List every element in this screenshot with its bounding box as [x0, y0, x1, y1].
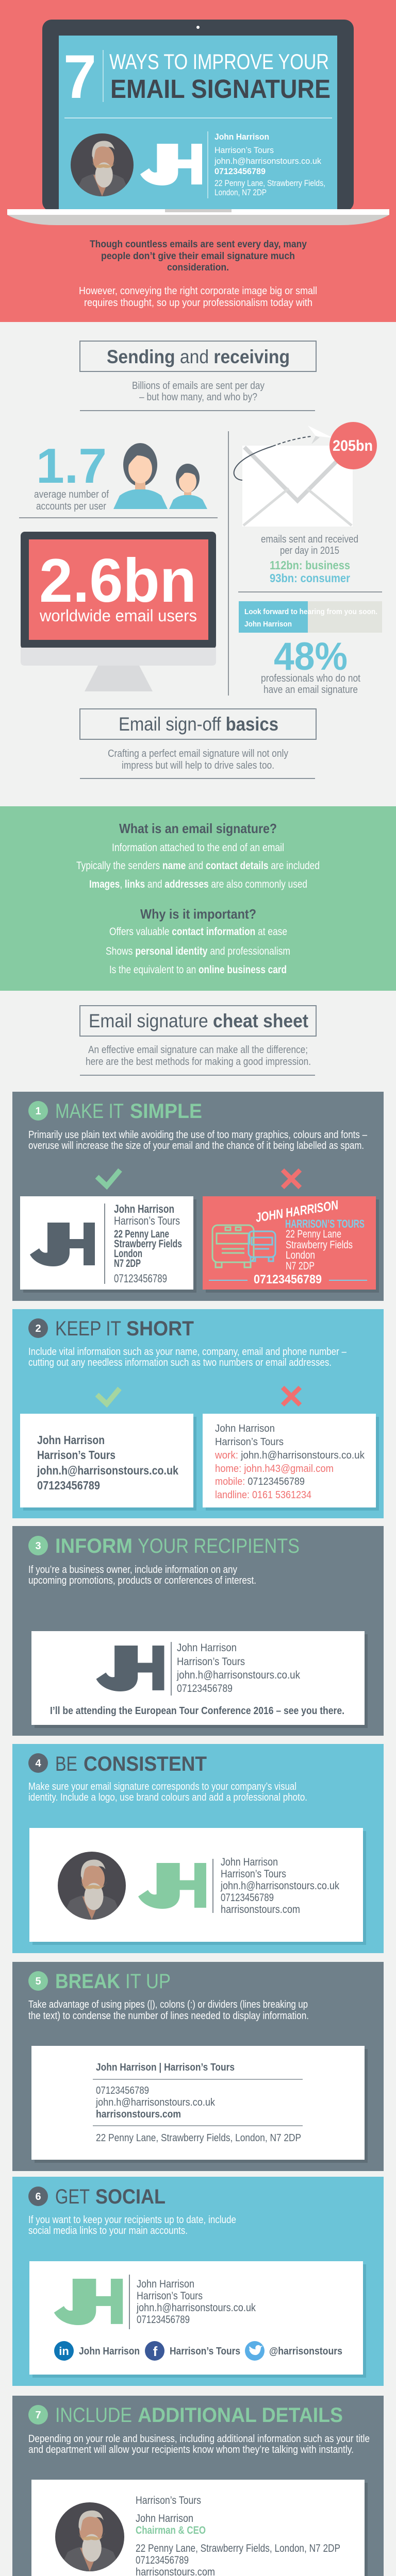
card: short signature	[20, 1414, 196, 1511]
card: good simple signature: Harrison’s Tours	[114, 1214, 180, 1227]
panel 3 description	[28, 1564, 256, 1586]
card: branded signature: Harrison’s Tours	[221, 1868, 286, 1880]
panel: what is an email signature: Information attached to the end of an email	[112, 842, 284, 854]
icon: facebook: f	[153, 2344, 158, 2359]
icon: cross	[283, 1387, 300, 1405]
panel 3 title: YOUR RECIPIENTS	[138, 1535, 300, 1557]
panel 3 title: INFORM	[55, 1535, 133, 1557]
card: bad busy signature: Strawberry Fields	[286, 1239, 353, 1251]
card: signature with event: 07123456789	[177, 1683, 233, 1694]
stat: 48%: Look forward to hearing from you soon.	[244, 607, 377, 616]
card: good simple signature: John Harrison	[114, 1202, 174, 1215]
subtitle: crafting: impress but will help to drive sales too.	[122, 760, 274, 771]
panel 6 description: social media links to your main accounts.	[28, 2225, 188, 2236]
icon: check	[97, 1170, 120, 1186]
card: bad busy signature: London	[286, 1249, 315, 1261]
panel: what is an email signature: Is the equivalent to an online business card	[109, 964, 287, 976]
stat: 1.7 accounts: accounts per user	[36, 501, 106, 512]
subtitle: billions: – but how many, and who by?	[139, 392, 257, 403]
subtitle: effective: here are the best methods for making a good impression.	[86, 1056, 311, 1067]
panel 4 description	[28, 1781, 307, 1803]
card: cluttered signature: work: john.h@harrisonstours.co.uk	[214, 1450, 365, 1461]
panel 5: break it up	[12, 1962, 384, 2171]
stat: 48%: 48%	[274, 635, 348, 679]
monitor: 2.6bn users: 2.6bn	[39, 546, 196, 615]
panel 1 description	[28, 1129, 368, 1151]
number badge 3: 3	[35, 1540, 41, 1552]
card: social signature: John Harrison	[79, 2346, 140, 2357]
card: good simple signature: 07123456789	[114, 1272, 167, 1285]
card: short signature: john.h@harrisonstours.co.uk	[37, 1464, 178, 1477]
panel 5 title: BREAK	[55, 1970, 120, 1993]
subtitle: crafting	[108, 748, 288, 771]
icon: twitter	[245, 2341, 265, 2361]
envelope: 205bn	[234, 422, 377, 527]
intro text: consideration.	[167, 262, 229, 273]
header band	[0, 0, 396, 322]
card: social signature	[29, 2261, 366, 2378]
intro text: people don’t give their email signature much	[101, 251, 295, 262]
panel 7 title: ADDITIONAL DETAILS	[138, 2404, 343, 2427]
panel 1: make it simple	[12, 1092, 384, 1301]
card: social signature: @harrisonstours	[269, 2346, 342, 2357]
card: social signature: Harrison’s Tours	[170, 2346, 240, 2357]
panel 6 title	[55, 2185, 166, 2208]
title: 7	[63, 42, 96, 111]
stat text: emails per day: per day in 2015	[280, 545, 339, 556]
number badge 7: 7	[35, 2410, 41, 2421]
stat: 48%: have an email signature	[263, 684, 358, 696]
card: good simple signature: London	[114, 1248, 142, 1260]
card: bad busy signature: 07123456789	[254, 1273, 322, 1286]
heading: sending and receiving	[80, 341, 316, 371]
panel 7 title	[55, 2404, 343, 2427]
panel 6: get social	[12, 2177, 384, 2386]
intro text: requires thought, so up your professionalism today with	[84, 297, 312, 309]
heading: cheat sheet	[80, 1006, 316, 1036]
panel 2 description	[28, 1346, 347, 1368]
header signature: 22 Penny Lane, Strawberry Fields,	[214, 178, 325, 188]
icon: check	[97, 1388, 120, 1404]
card: bad busy signature	[203, 1196, 379, 1293]
card: bad busy signature: HARRISON’S TOURS	[285, 1217, 365, 1230]
number badge 6	[28, 2187, 48, 2206]
panel 3 description: If you’re a business owner, include information on any	[28, 1564, 237, 1575]
card: bad busy signature: N7 2DP	[286, 1260, 315, 1272]
card: detailed signature: Harrison’s Tours	[136, 2495, 201, 2506]
header signature: john.h@harrisonstours.co.uk	[214, 156, 321, 166]
header signature: 07123456789	[214, 166, 266, 176]
card: social signature: 07123456789	[137, 2314, 190, 2326]
icon: linkedin: in	[59, 2345, 69, 2358]
header signature: London, N7 2DP	[214, 188, 267, 197]
panel 6 title: SOCIAL	[95, 2185, 166, 2208]
card: divided signature: John Harrison | Harrison’s Tours	[96, 2062, 235, 2073]
card: branded signature: John Harrison	[221, 1856, 278, 1868]
card: divided signature: 22 Penny Lane, Strawberry Fields, London, N7 2DP	[96, 2132, 301, 2144]
panel 4: be consistent	[12, 1744, 384, 1953]
card: divided signature: john.h@harrisonstours.co.uk	[95, 2097, 216, 2108]
panel: what is an email signature: What is an email signature?	[119, 821, 277, 836]
card: signature with event	[31, 1631, 368, 1728]
subtitle: billions	[132, 380, 265, 403]
card: cluttered signature: Harrison’s Tours	[215, 1436, 284, 1448]
heading: sending and receiving: Sending and receiving	[107, 346, 290, 367]
icon: facebook	[145, 2341, 164, 2361]
number badge 1: 1	[35, 1106, 41, 1117]
panel 3 title	[55, 1535, 300, 1557]
stat: 1.7 accounts: average number of	[34, 489, 109, 500]
panel 1 title: MAKE IT	[55, 1100, 124, 1123]
panel 5 title: IT UP	[125, 1970, 171, 1993]
subtitle: effective: An effective email signature can make all the difference;	[88, 1044, 308, 1056]
subtitle: crafting: Crafting a perfect email signature will not only	[108, 748, 288, 759]
number badge 2: 2	[35, 1323, 41, 1334]
icon: people	[113, 443, 207, 509]
panel: what is an email signature: Images, links and addresses are also commonly used	[89, 878, 307, 890]
number badge 1	[28, 1101, 48, 1121]
panel 2 description: cutting out any needless information such as two numbers or email addresses.	[28, 1357, 332, 1368]
panel 2 title	[55, 1317, 194, 1340]
panel 2: keep it short	[12, 1309, 384, 1518]
title	[63, 42, 331, 111]
subtitle: effective	[86, 1044, 311, 1067]
panel: what is an email signature: Why is it important?	[140, 906, 256, 922]
panel 7 description	[28, 2433, 370, 2455]
header signature	[71, 131, 325, 198]
card: good simple signature: N7 2DP	[114, 1258, 141, 1269]
number badge 7	[28, 2405, 48, 2425]
heading: email sign-off basics	[80, 709, 316, 739]
panel 6 description: If you want to keep your recipients up to date, include	[28, 2214, 236, 2226]
title: WAYS TO IMPROVE YOUR	[109, 49, 329, 74]
panel 4 title: CONSISTENT	[84, 1753, 207, 1775]
card: cluttered signature: home: john.h43@gmail.com	[215, 1463, 334, 1475]
card: branded signature: 07123456789	[221, 1892, 274, 1904]
card: social signature: John Harrison	[137, 2278, 194, 2290]
card: detailed signature: John Harrison	[136, 2513, 193, 2524]
heading: email sign-off basics: Email sign-off basics	[119, 714, 278, 735]
card: detailed signature: Chairman & CEO	[136, 2524, 206, 2536]
panel 2 title: KEEP IT	[55, 1317, 121, 1340]
card: social signature: john.h@harrisonstours.co.uk	[136, 2302, 256, 2314]
card: cluttered signature: John Harrison	[215, 1423, 275, 1434]
panel 2 description: Include vital information such as your name, company, email and phone number –	[28, 1346, 347, 1358]
monitor: 2.6bn users: worldwide email users	[39, 606, 197, 625]
panel 5 description: Take advantage of using pipes (|), colons (:) or dividers (lines breaking up	[28, 1999, 308, 2010]
card: signature with event: John Harrison	[177, 1642, 237, 1654]
card: signature with event: john.h@harrisonstours.co.uk	[176, 1669, 300, 1681]
panel 6 title: GET	[55, 2185, 90, 2208]
intro text: However, conveying the right corporate image big or small	[79, 285, 317, 297]
card: branded signature: john.h@harrisonstours.co.uk	[220, 1880, 339, 1892]
panel 1 title: SIMPLE	[130, 1100, 202, 1123]
number badge 4	[28, 1753, 48, 1773]
card: divided signature: harrisonstours.com	[96, 2109, 181, 2120]
panel: what is an email signature	[0, 806, 396, 991]
stat: 1.7 accounts	[34, 438, 207, 512]
card: detailed signature: 07123456789	[136, 2554, 189, 2566]
card: detailed signature	[31, 2480, 368, 2576]
header signature: Harrison’s Tours	[214, 145, 274, 155]
card: branded signature	[29, 1828, 366, 1945]
number badge 5: 5	[35, 1976, 41, 1987]
card: bad busy signature: 22 Penny Lane	[286, 1228, 341, 1240]
card: signature with event: I’ll be attending the European Tour Conference 2016 – see you there.	[50, 1705, 344, 1717]
card: cluttered signature: landline: 0161 5361234	[215, 1489, 311, 1501]
number badge 5	[28, 1971, 48, 1991]
panel 5 title	[55, 1970, 171, 1993]
panel 4 description: Make sure your email signature corresponds to your company’s visual	[28, 1781, 296, 1792]
card: divided signature	[31, 2046, 368, 2163]
card: divided signature: 07123456789	[96, 2085, 149, 2096]
panel 1 title	[55, 1100, 202, 1123]
header signature: John Harrison	[214, 132, 269, 142]
panel: what is an email signature: Shows personal identity and professionalism	[106, 945, 290, 957]
intro text	[79, 239, 317, 309]
card: signature with event: Harrison’s Tours	[177, 1656, 245, 1668]
envelope: 205bn: 205bn	[333, 437, 373, 454]
card: good simple signature: 22 Penny Lane	[114, 1228, 169, 1240]
panel 5 description	[28, 1999, 309, 2022]
card: short signature: 07123456789	[37, 1479, 100, 1492]
panel 4 description: identity. Include a logo, use brand colours and add a professional photo.	[28, 1792, 307, 1803]
panel 3 description: upcoming promotions, products or conferences of interest.	[28, 1575, 256, 1586]
card: cluttered signature: mobile: 07123456789	[215, 1476, 305, 1487]
card: detailed signature: 22 Penny Lane, Strawberry Fields, London, N7 2DP	[136, 2543, 340, 2554]
stat text: emails per day	[261, 534, 358, 585]
panel 2 title: SHORT	[126, 1317, 194, 1340]
number badge 4: 4	[35, 1758, 41, 1769]
stat text: emails per day: 93bn: consumer	[270, 571, 350, 585]
card: cluttered signature	[203, 1414, 379, 1511]
panel 4 title: BE	[55, 1753, 77, 1775]
panel 5 description: the text) to condense the number of lines needed to display information.	[28, 2010, 309, 2022]
icon: linkedin	[54, 2341, 74, 2361]
laptop	[7, 20, 389, 225]
number badge 6: 6	[35, 2191, 41, 2202]
stat: 48%: John Harrison	[244, 620, 292, 629]
card: short signature: John Harrison	[37, 1433, 105, 1447]
title: EMAIL SIGNATURE	[110, 74, 331, 104]
subtitle: billions: Billions of emails are sent per day	[132, 380, 265, 392]
stat: 48%: professionals who do not	[261, 673, 360, 684]
card: short signature: Harrison’s Tours	[37, 1448, 116, 1462]
card: branded signature: harrisonstours.com	[221, 1904, 300, 1916]
panel: what is an email signature: Typically the senders name and contact details are included	[76, 860, 320, 872]
card: good simple signature	[20, 1196, 196, 1293]
icon: cross	[283, 1170, 300, 1188]
panel 7 title: INCLUDE	[55, 2404, 132, 2427]
panel: what is an email signature: Offers valuable contact information at ease	[109, 926, 287, 938]
panel 6 description	[28, 2214, 236, 2236]
card: good simple signature: Strawberry Fields	[114, 1238, 182, 1250]
number badge 3	[28, 1536, 48, 1555]
heading: cheat sheet: Email signature cheat sheet	[89, 1010, 308, 1031]
number badge 2	[28, 1318, 48, 1338]
stat: 48%	[239, 601, 382, 696]
card: bad busy signature: JOHN HARRISON	[255, 1198, 340, 1225]
stat: 1.7 accounts: 1.7	[36, 438, 107, 494]
card: social signature: Harrison’s Tours	[137, 2290, 203, 2302]
stat text: emails per day: emails sent and received	[261, 534, 358, 545]
panel 3: inform your recipients	[12, 1526, 384, 1736]
intro text: Though countless emails are sent every day, many	[90, 239, 307, 250]
panel 7: include additional details	[12, 2396, 384, 2576]
icon: buses	[212, 1225, 275, 1267]
panel 7 description: and department will allow your recipients know whom they’re talking with instantly.	[28, 2444, 354, 2455]
monitor: 2.6bn users	[21, 532, 216, 691]
stat text: emails per day: 112bn: business	[270, 558, 350, 572]
